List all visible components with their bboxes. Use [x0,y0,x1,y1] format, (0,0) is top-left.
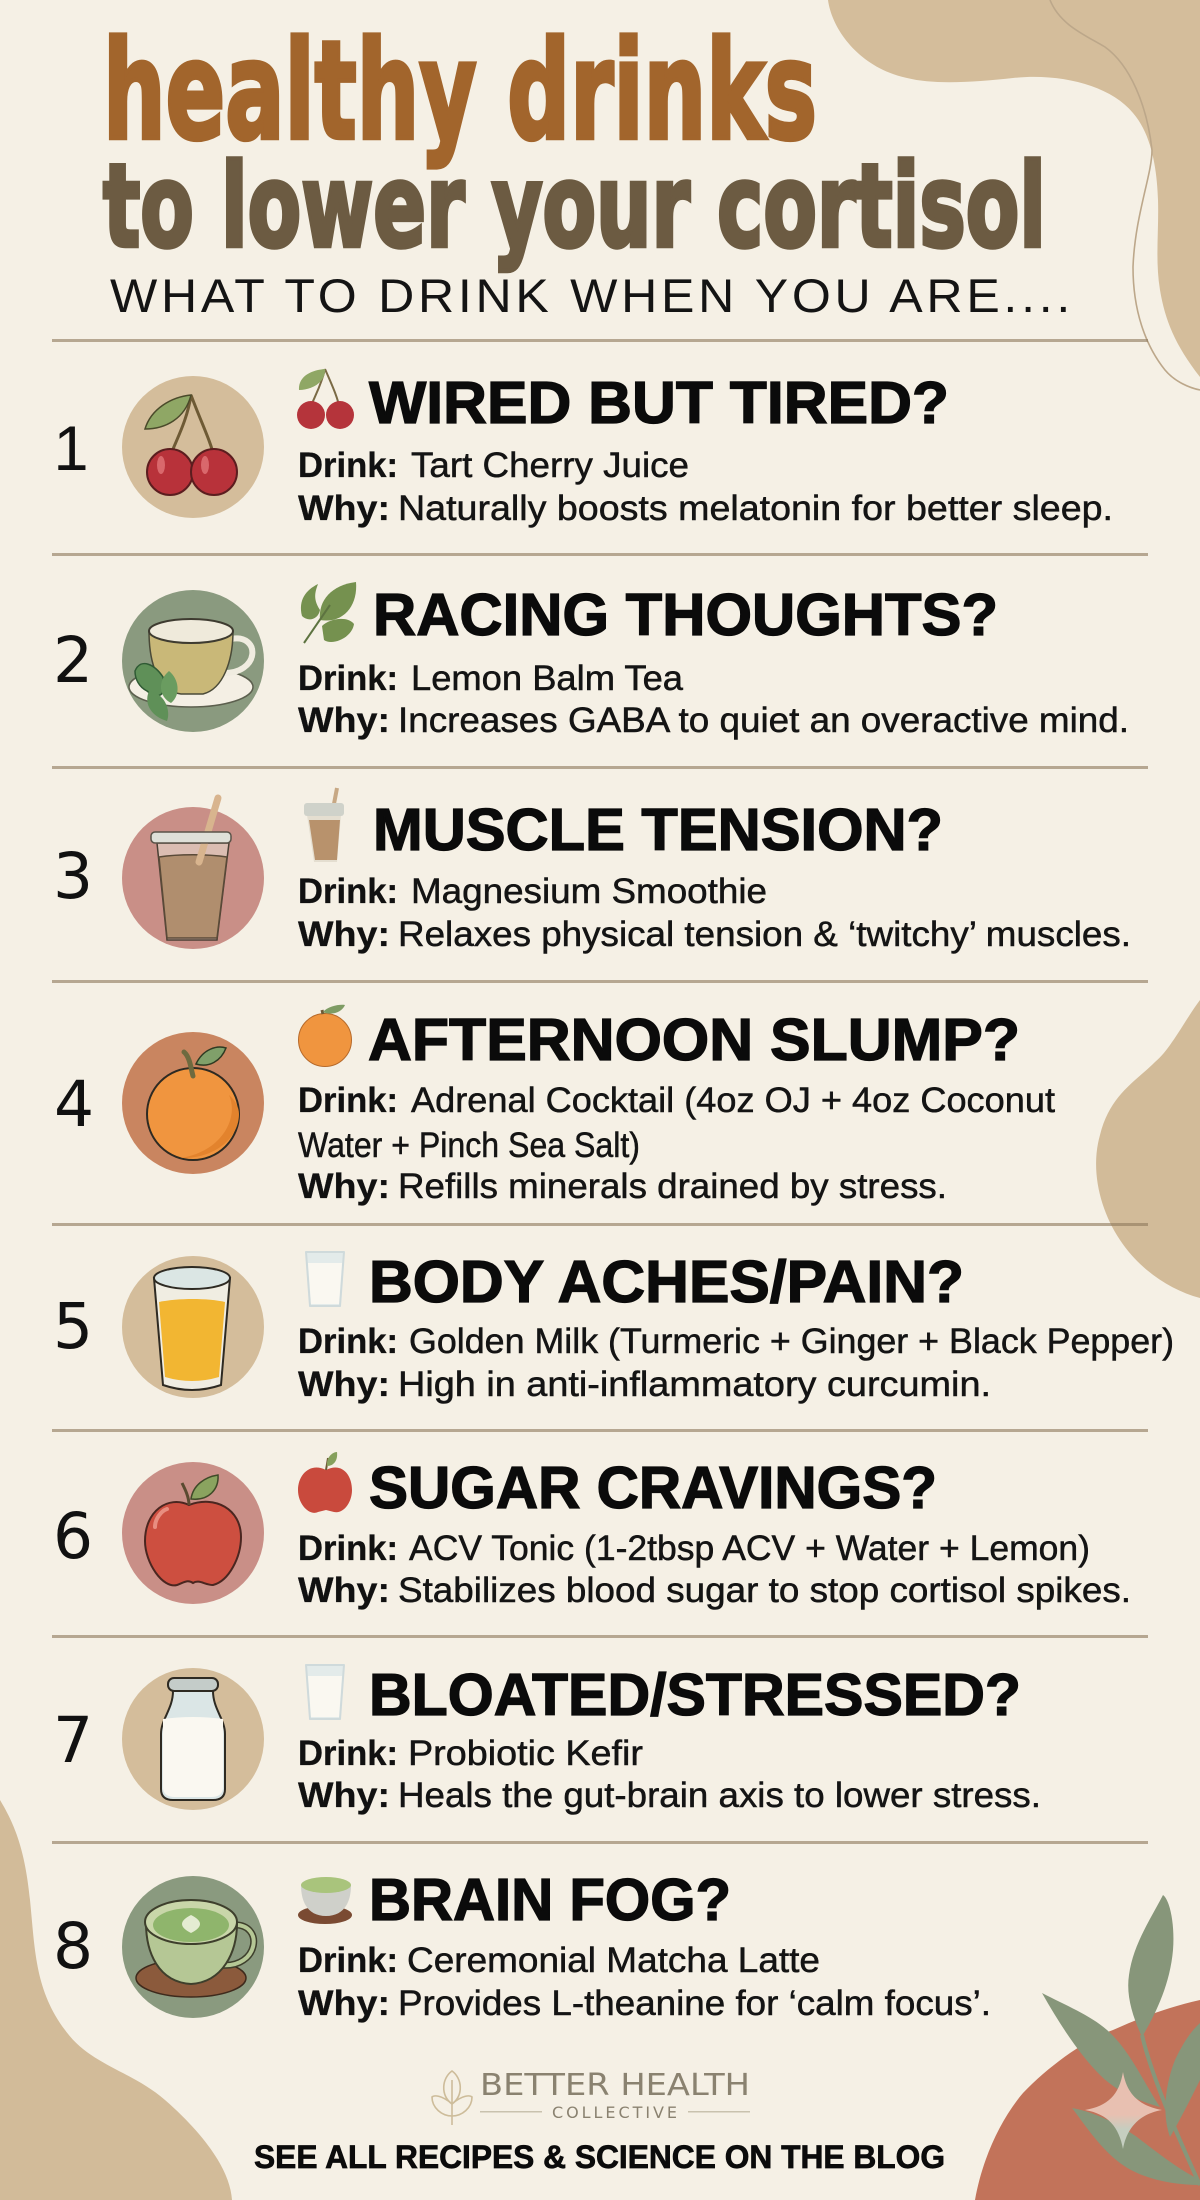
heading: BRAIN FOG? [369,1867,731,1933]
panel: row 3 muscle tension [53,788,1131,954]
drink line: Lemon Balm Tea [411,659,684,698]
why line: Why: [298,1984,390,2023]
heading: RACING THOUGHTS? [373,582,998,648]
icon: smoothie in circle [122,798,264,949]
why line: Why: [298,489,390,528]
icon: sparkle [1085,2072,1162,2149]
logo: better health collective: COLLECTIVE [552,2103,677,2122]
why line: Naturally boosts melatonin for better sleep. [398,489,1113,528]
number 2: 2 [53,624,93,697]
title line 1: healthy drinks [103,13,817,171]
panel: row 6 sugar cravings [53,1452,1131,1610]
panel: row 2 racing thoughts [53,582,1129,740]
icon: kefir bottle in circle [122,1668,264,1810]
drink line: Probiotic Kefir [408,1734,643,1773]
decorative blob: top right [828,0,1200,390]
drink line: Drink: [298,1529,398,1568]
number 7: 7 [53,1704,93,1777]
drink line: Magnesium Smoothie [411,872,767,911]
icon: small glass of milk [306,1252,344,1306]
heading: MUSCLE TENSION? [373,797,943,863]
drink line: Drink: [298,659,398,698]
drink line: Tart Cherry Juice [411,446,689,485]
icon: golden milk glass in circle [122,1256,264,1398]
icon: tea cup in circle [122,590,264,732]
drink line: Golden Milk (Turmeric + Ginger + Black Pepper) [409,1322,1174,1361]
why line: Why: [298,701,390,740]
icon: matcha latte in circle [122,1876,264,2018]
why line: Increases GABA to quiet an overactive mind. [398,701,1129,740]
icon: cherries in circle [122,376,264,518]
why line: Heals the gut-brain axis to lower stress. [398,1776,1041,1815]
decorative blob: bottom right with leaves and sparkle [975,1895,1200,2200]
icon: small smoothie cup [304,788,344,862]
drink line: Drink: [298,1941,398,1980]
drink line: ACV Tonic (1-2tbsp ACV + Water + Lemon) [409,1529,1090,1568]
drink line: Drink: [298,1081,398,1120]
panel: row 7 bloated stressed [53,1662,1041,1815]
number 4: 4 [54,1068,94,1141]
call to action footer: SEE ALL RECIPES & SCIENCE ON THE BLOG [254,2139,945,2175]
number 3: 3 [53,840,93,913]
drink line: Water + Pinch Sea Salt) [298,1126,640,1165]
drink line: Drink: [298,446,398,485]
icon: logo leaf [432,2071,472,2125]
logo: better health collective [432,2068,750,2125]
drink line [298,446,689,485]
heading: BODY ACHES/PAIN? [369,1249,964,1315]
drink line: Drink: [298,1322,398,1361]
number 1: 1 [53,414,89,484]
panel: row 8 brain fog [53,1867,991,2023]
decorative blob: bottom left [0,1800,232,2200]
icon: small mint leaves [301,582,356,643]
why line: Provides L-theanine for ‘calm focus’. [398,1984,991,2023]
number 6: 6 [53,1500,93,1573]
panel: row 1 wired but tired [53,369,1113,528]
why line: Why: [298,1776,390,1815]
heading: BLOATED/STRESSED? [369,1662,1021,1728]
subtitle: WHAT TO DRINK WHEN YOU ARE.... [110,269,1074,322]
icon: small matcha cup [298,1877,352,1924]
icon: orange in circle [122,1032,264,1174]
why line: Why: [298,915,390,954]
panel: row 5 body aches [53,1249,1174,1404]
icon: small orange [298,1005,352,1066]
number 8: 8 [53,1910,93,1983]
why line: Why: [298,1571,390,1610]
why line: Why: [298,1167,390,1206]
decorative blob: right middle [1096,1000,1200,1298]
heading: WIRED BUT TIRED? [369,370,949,436]
drink line: Ceremonial Matcha Latte [407,1941,820,1980]
why line: Stabilizes blood sugar to stop cortisol spikes. [398,1571,1131,1610]
drink line: Adrenal Cocktail (4oz OJ + 4oz Coconut [411,1081,1055,1120]
icon: small glass of kefir [306,1665,344,1719]
number 5: 5 [53,1290,93,1363]
why line: Relaxes physical tension & ‘twitchy’ muscles. [398,915,1131,954]
drink line [298,1734,643,1773]
panel: row 4 afternoon slump [54,1005,1055,1206]
why line: Why: [298,1365,390,1404]
drink line: Drink: [298,872,398,911]
icon: small apple [298,1452,352,1513]
title [103,13,1046,274]
drink line [298,659,684,698]
heading: AFTERNOON SLUMP? [368,1007,1020,1073]
icon: apple in circle [122,1462,264,1604]
drink line: Drink: [298,1734,398,1773]
why line: Refills minerals drained by stress. [398,1167,947,1206]
drink line [298,1081,1055,1165]
logo: better health collective: BETTER HEALTH [480,2068,750,2103]
why line: High in anti-inflammatory curcumin. [398,1365,991,1404]
heading: SUGAR CRAVINGS? [369,1455,937,1521]
icon: small cherries [297,369,354,429]
row dividers [52,339,1148,1844]
